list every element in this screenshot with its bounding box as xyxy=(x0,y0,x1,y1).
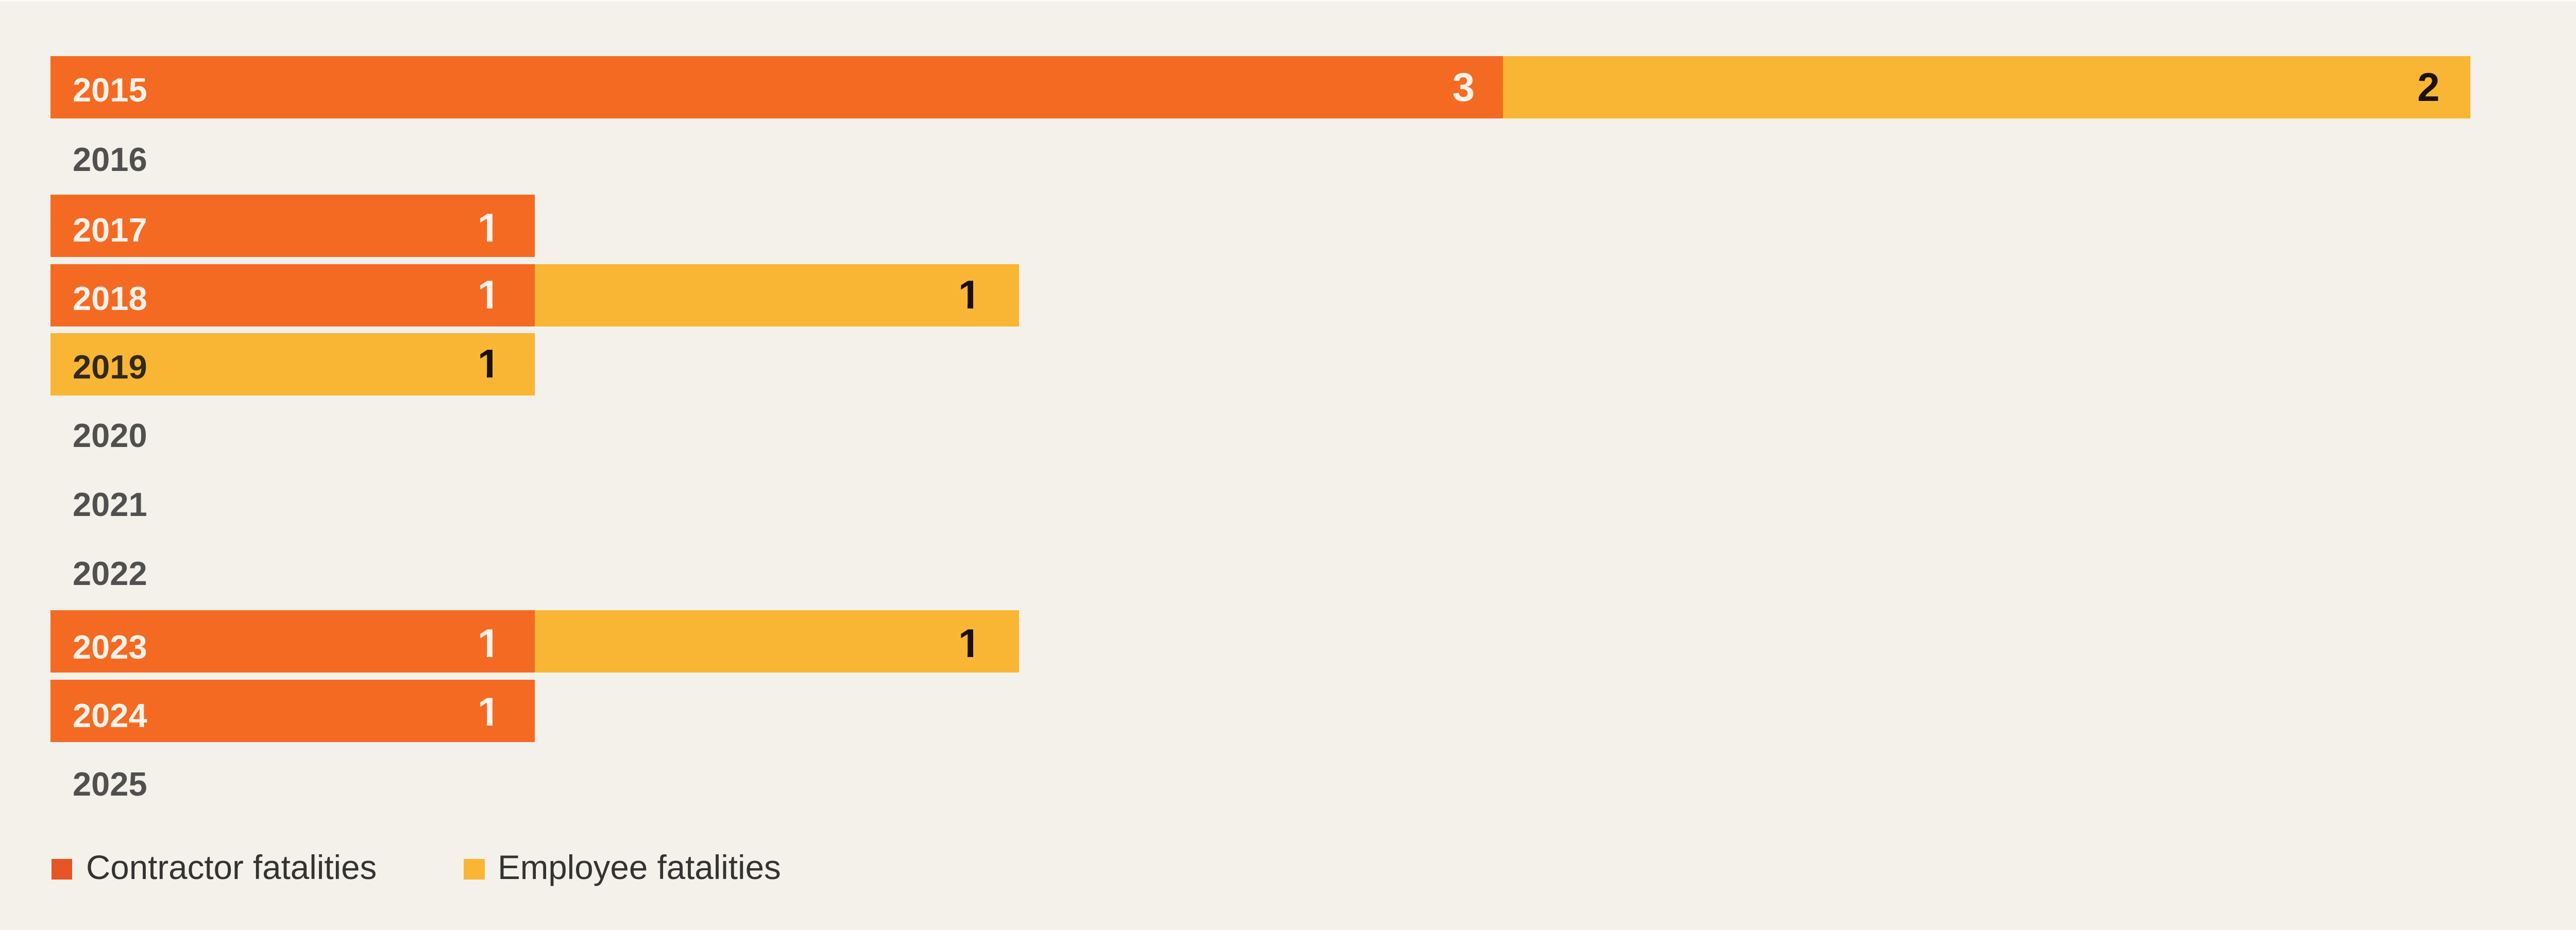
row 2015 xyxy=(50,56,2470,118)
row 2023: 1 xyxy=(478,621,500,666)
row 2024: 2024 xyxy=(73,697,147,734)
row 2019: 1 xyxy=(478,341,500,386)
row 2023: 2023 xyxy=(73,628,147,666)
row 2022: 2022 xyxy=(73,555,147,592)
row 2018: 2018 xyxy=(73,280,147,317)
row 2017: 2017 xyxy=(73,211,147,249)
row 2024: 1 xyxy=(478,689,500,734)
row 2024 xyxy=(50,680,535,742)
row 2019: 2019 xyxy=(73,348,147,386)
legend item: employee fatalities: Employee fatalities xyxy=(498,849,781,886)
row 2018: 1 xyxy=(958,272,980,317)
row 2023 xyxy=(50,610,1019,673)
row 2017: 1 xyxy=(478,205,500,250)
row 2015: 3 xyxy=(1452,64,1475,110)
row 2023: 1 xyxy=(958,621,980,666)
row 2019 xyxy=(50,333,535,395)
row 2020: 2020 xyxy=(73,417,147,454)
row 2015: 2 xyxy=(2417,64,2439,110)
row 2018: 1 xyxy=(478,272,500,317)
row 2018 xyxy=(50,264,1019,326)
row 2017 xyxy=(50,195,535,257)
legend xyxy=(52,849,781,886)
row 2015: 2015 xyxy=(73,71,147,109)
row 2025: 2025 xyxy=(73,765,147,803)
legend item: contractor fatalities: Contractor fatalities xyxy=(86,849,377,886)
row 2021: 2021 xyxy=(73,486,147,523)
row 2016: 2016 xyxy=(73,141,147,178)
bar chart: fatalities by year xyxy=(50,56,2470,803)
